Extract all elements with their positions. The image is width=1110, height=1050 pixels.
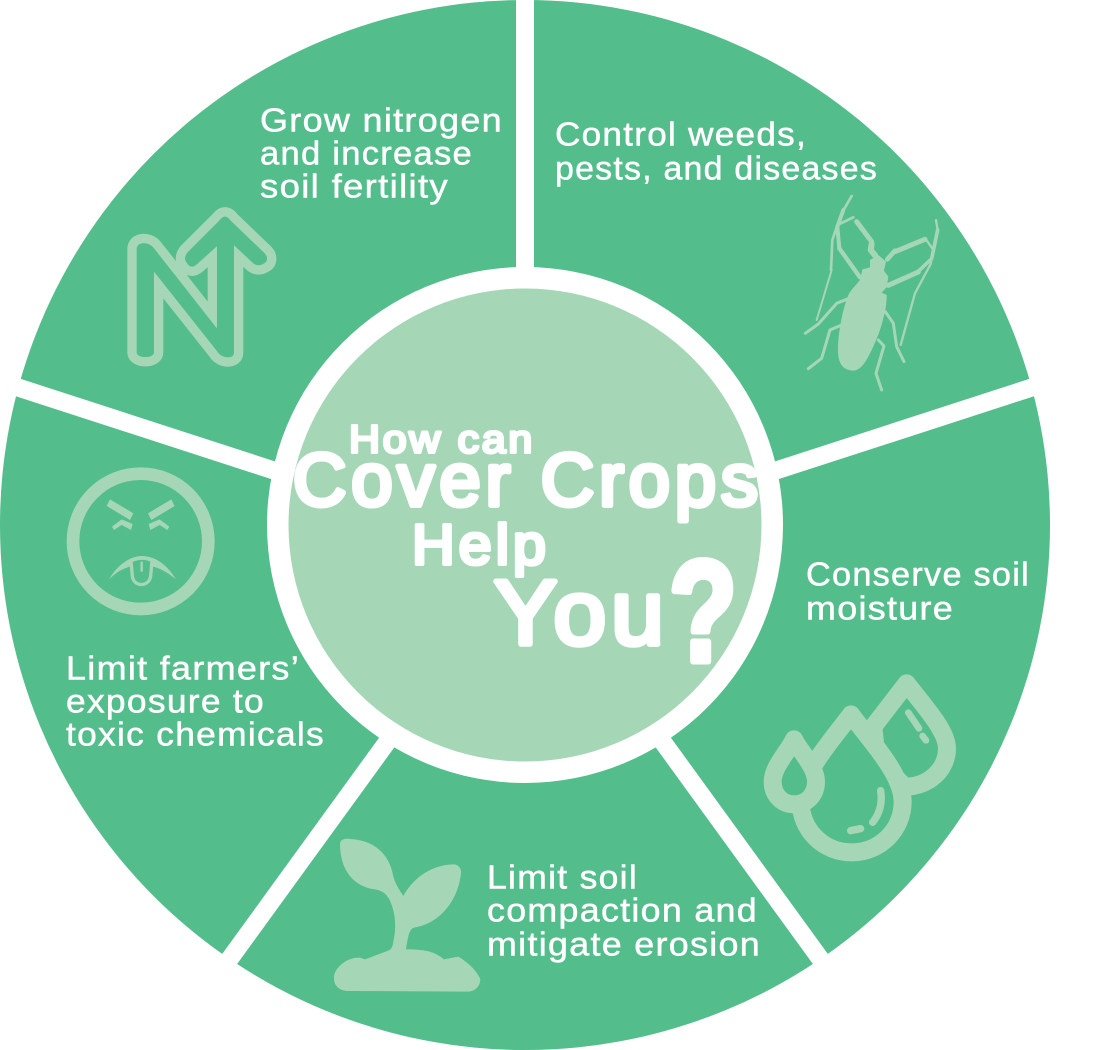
icon: sprout [334,839,480,992]
label: soil moisture [806,556,1030,626]
center title: Cover Crops [293,438,763,522]
label: nitrogen: Grow nitrogen [260,102,503,138]
center title: You [494,563,669,664]
icon: nitrogen N with up arrow [132,212,272,362]
label: soil compaction: mitigate erosion [487,926,761,962]
label: toxic chemicals: Limit farmers’ [66,650,300,686]
label: toxic chemicals: toxic chemicals [66,716,325,752]
label: nitrogen [260,102,503,204]
label: soil moisture: moisture [806,590,954,626]
center title [293,418,763,692]
segment: weeds and pests [555,116,938,390]
label: soil compaction: Limit soil [487,858,638,896]
label: toxic chemicals [66,650,325,752]
light green hub [288,288,762,762]
segment: soil compaction [334,839,761,992]
center title: ? [669,531,737,692]
label: nitrogen: soil fertility [260,168,449,204]
label: weeds and pests [555,116,878,186]
label: soil moisture: Conserve soil [806,556,1030,592]
segment: soil moisture [773,556,1030,852]
icon: water drops [773,683,947,852]
center title: How can [349,418,535,462]
segment: toxic chemicals [66,474,325,752]
label: nitrogen: and increase [260,134,473,172]
icon: sick face [73,474,208,609]
segment: nitrogen [132,102,503,362]
label: soil compaction [487,858,761,962]
white hub ring [267,267,783,783]
label: soil compaction: compaction and [487,892,758,928]
label: weeds and pests: Control weeds, [555,116,807,152]
icon: beetle [805,196,938,390]
label: toxic chemicals: exposure to [66,682,265,720]
center title: Help [412,513,550,577]
label: weeds and pests: pests, and diseases [555,150,878,186]
